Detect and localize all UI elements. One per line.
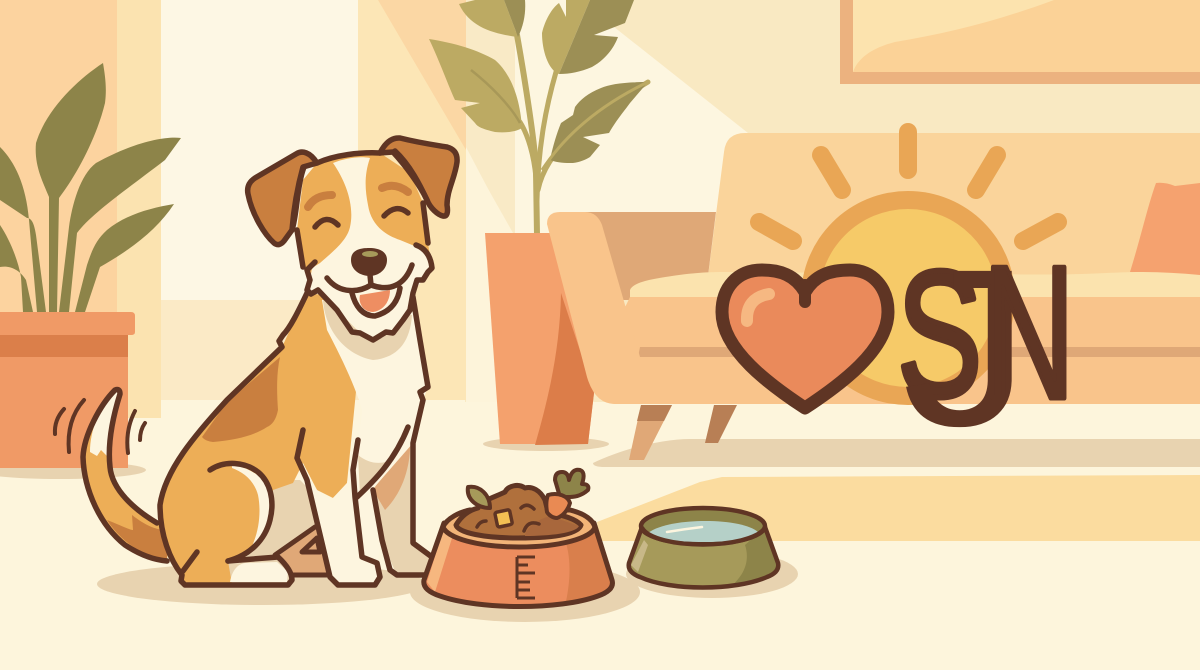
dog xyxy=(55,138,457,585)
shadow under water bowl xyxy=(626,550,798,598)
rug xyxy=(597,475,1200,541)
seat body xyxy=(590,297,1200,404)
chin shadow xyxy=(323,300,412,360)
dog chest xyxy=(322,297,428,498)
logo lettering SJN: J xyxy=(902,223,1031,473)
floor shadow under dog xyxy=(97,563,427,605)
plant: center potted plant xyxy=(429,0,648,451)
heart logo xyxy=(722,270,888,408)
head outline xyxy=(297,153,432,340)
sofa front arm xyxy=(547,212,640,404)
dog tail xyxy=(83,390,170,561)
plant: left potted plant xyxy=(0,63,181,479)
left ear xyxy=(248,152,317,245)
dog front leg xyxy=(300,462,380,585)
dog back spot xyxy=(202,357,280,442)
seat cushion xyxy=(630,272,1200,297)
eyebrows xyxy=(308,186,408,207)
sun logo xyxy=(759,132,1058,405)
water surface xyxy=(648,521,758,542)
sofa inner arm xyxy=(585,212,716,300)
food cube xyxy=(495,509,512,527)
sofa xyxy=(547,133,1200,460)
food bowl xyxy=(424,470,612,606)
head fill xyxy=(297,153,432,340)
food leaf xyxy=(468,487,490,508)
seat band xyxy=(638,347,1200,357)
eyes xyxy=(315,209,408,227)
nose xyxy=(351,248,387,276)
dog body xyxy=(160,293,365,584)
logo lettering SJN: N xyxy=(982,227,1075,439)
dog head xyxy=(248,138,457,340)
dog hind paw and under-body shade xyxy=(240,430,432,576)
food xyxy=(456,485,581,538)
plant pot left xyxy=(0,312,135,468)
right ear xyxy=(380,138,457,216)
painting on the wall xyxy=(840,0,1200,84)
sun rays xyxy=(759,132,1058,241)
plant pot center xyxy=(485,233,594,445)
white blaze and muzzle xyxy=(308,157,432,340)
dog haunch xyxy=(210,463,273,561)
leaves xyxy=(459,0,518,37)
bowl measuring marks xyxy=(517,557,535,598)
stems xyxy=(517,35,648,235)
dog outlines xyxy=(160,293,432,585)
water bowl xyxy=(629,508,778,588)
sofa legs xyxy=(629,405,737,460)
shadow under food bowl xyxy=(410,562,640,622)
sofa back xyxy=(705,133,1200,300)
wag lines xyxy=(55,400,145,453)
mouth and tongue xyxy=(327,265,412,316)
sofa shadow xyxy=(593,439,1200,467)
logo lettering SJN: S xyxy=(897,235,982,435)
carrot xyxy=(546,470,588,518)
dog hind foot xyxy=(230,562,288,582)
pillow xyxy=(1130,183,1200,277)
